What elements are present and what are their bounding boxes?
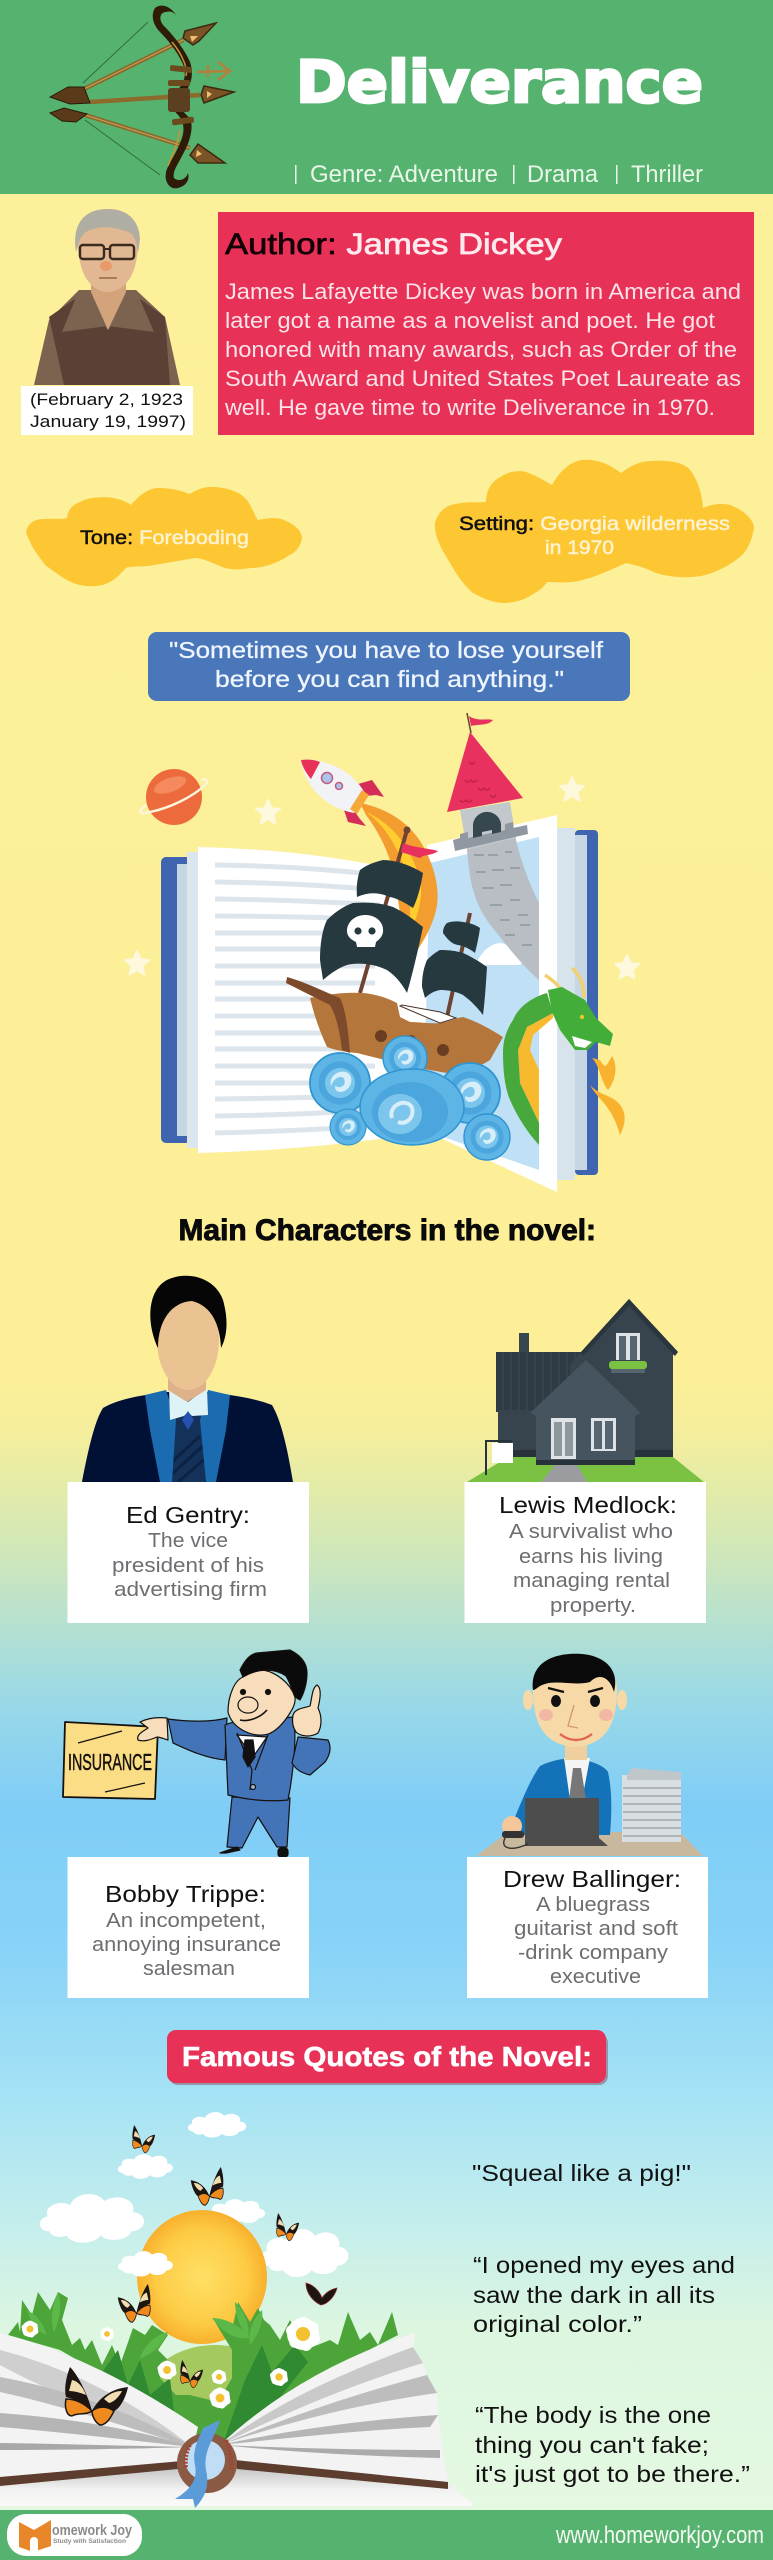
quote one: "Squeal like a pig!" xyxy=(472,2160,691,2186)
icon: pirate ship xyxy=(286,826,503,1073)
character: Bobby Trippe xyxy=(63,1650,330,1998)
card: Bobby Trippe: Bobby Trippe: xyxy=(105,1881,266,1907)
logo xyxy=(7,2514,142,2556)
quote two: “I opened my eyes and xyxy=(473,2252,735,2278)
card: Ed Gentry: advertising firm xyxy=(114,1579,267,1601)
icon: house xyxy=(467,1299,704,1482)
card: Lewis Medlock: A survivalist who xyxy=(509,1521,673,1543)
icon: bow and arrows xyxy=(50,6,234,188)
card: Ed Gentry xyxy=(68,1482,309,1623)
card: Lewis Medlock: managing rental xyxy=(513,1570,670,1592)
quote three: “The body is the one xyxy=(475,2402,711,2428)
character: Ed Gentry xyxy=(68,1276,309,1623)
quote two xyxy=(473,2252,735,2337)
icon: insurance salesman xyxy=(63,1650,330,1857)
icon: clouds xyxy=(40,2112,246,2277)
card: Lewis Medlock xyxy=(464,1482,706,1623)
card: Bobby Trippe xyxy=(68,1857,309,1998)
cloud: tone: Tone: Foreboding xyxy=(80,528,249,549)
book covers and left page xyxy=(161,847,440,1153)
quote three xyxy=(475,2402,750,2487)
illustration: open story book xyxy=(125,713,639,1192)
genre line: Drama xyxy=(527,161,599,188)
card: Lewis Medlock: property. xyxy=(550,1595,636,1617)
icon: daisies xyxy=(22,2317,320,2409)
quote two: saw the dark in all its xyxy=(473,2282,715,2308)
author portrait xyxy=(34,209,180,385)
genre line xyxy=(295,161,703,188)
illustration: book with sun, clouds and butterflies xyxy=(0,2112,473,2508)
quotes xyxy=(472,2160,750,2487)
icon: planet xyxy=(140,769,207,825)
icon: sun xyxy=(137,2199,348,2344)
card: Drew Ballinger: guitarist and soft xyxy=(514,1918,678,1940)
icon: man in suit xyxy=(82,1276,293,1482)
author heading: Author: James Dickey xyxy=(225,228,562,261)
icon: ribbon xyxy=(175,2420,220,2508)
title: Deliverance xyxy=(296,48,703,116)
card: Ed Gentry: Ed Gentry: xyxy=(126,1502,250,1528)
card: Ed Gentry: president of his xyxy=(112,1555,264,1577)
card: Bobby Trippe: annoying insurance xyxy=(92,1934,281,1956)
quote banner xyxy=(148,632,630,701)
heading: main characters: Main Characters in the novel: xyxy=(178,1214,596,1247)
card: Ed Gentry: The vice xyxy=(148,1530,228,1552)
genre line: Genre: Adventure xyxy=(310,161,498,188)
logo: omework Joy xyxy=(52,2523,132,2539)
date box xyxy=(21,386,193,435)
footer band xyxy=(0,2510,773,2560)
cloud: setting xyxy=(435,460,754,603)
quote three: thing you can't fake; xyxy=(475,2432,709,2458)
heading: famous quotes xyxy=(167,2030,608,2085)
card: Lewis Medlock: earns his living xyxy=(519,1546,663,1568)
logo: Study with Satisfaction xyxy=(53,2538,126,2545)
date box: (February 2, 1923 xyxy=(30,390,183,409)
biography text: James Lafayette Dickey was born in America and xyxy=(225,279,741,304)
card: Lewis Medlock: Lewis Medlock: xyxy=(499,1492,677,1518)
hill xyxy=(150,2345,255,2410)
cloud: tone xyxy=(26,487,302,586)
icon: ocean waves xyxy=(310,1036,510,1160)
card: Drew Ballinger: Drew Ballinger: xyxy=(503,1866,681,1892)
heading: famous quotes: Famous Quotes of the Novel: xyxy=(182,2041,592,2072)
header band xyxy=(0,0,773,194)
book right page xyxy=(423,815,598,1192)
card: Drew Ballinger: -drink company xyxy=(518,1942,668,1964)
quote two: original color.” xyxy=(473,2311,642,2337)
biography text: South Award and United States Poet Laureate as xyxy=(225,366,741,391)
card: Drew Ballinger: executive xyxy=(550,1966,641,1988)
quote three: it's just got to be there.” xyxy=(475,2461,750,2487)
icon: castle tower xyxy=(447,713,539,980)
character: Lewis Medlock xyxy=(464,1299,706,1623)
icon: insurance salesman: INSURANCE xyxy=(68,1749,152,1775)
card: Drew Ballinger xyxy=(467,1857,708,1998)
card: Bobby Trippe: An incompetent, xyxy=(106,1910,266,1932)
cloud: setting: Setting: Georgia wilderness xyxy=(459,514,730,535)
icon: dragon xyxy=(503,968,625,1145)
cloud: setting: in 1970 xyxy=(545,538,614,559)
biography text: later got a name as a novelist and poet. He got xyxy=(225,308,716,333)
icon: butterflies xyxy=(65,2125,337,2425)
date box: January 19, 1997) xyxy=(30,412,186,431)
biography text: well. He gave time to write Deliverance in 1970. xyxy=(224,395,715,420)
character: Drew Ballinger xyxy=(467,1654,708,1998)
icon: man at laptop xyxy=(476,1654,703,1856)
panel: author biography xyxy=(218,212,754,435)
card: Drew Ballinger: A bluegrass xyxy=(536,1894,650,1916)
quote banner: "Sometimes you have to lose yourself xyxy=(169,637,604,663)
genre line: Thriller xyxy=(631,161,703,188)
biography text xyxy=(224,279,741,420)
open book xyxy=(0,2333,473,2506)
quote banner: before you can find anything." xyxy=(215,666,564,692)
icon: rocket xyxy=(301,760,438,962)
grass xyxy=(8,2292,404,2445)
card: Bobby Trippe: salesman xyxy=(143,1958,235,1980)
icon: stars xyxy=(125,777,639,978)
biography text: honored with many awards, such as Order of the xyxy=(225,337,737,362)
